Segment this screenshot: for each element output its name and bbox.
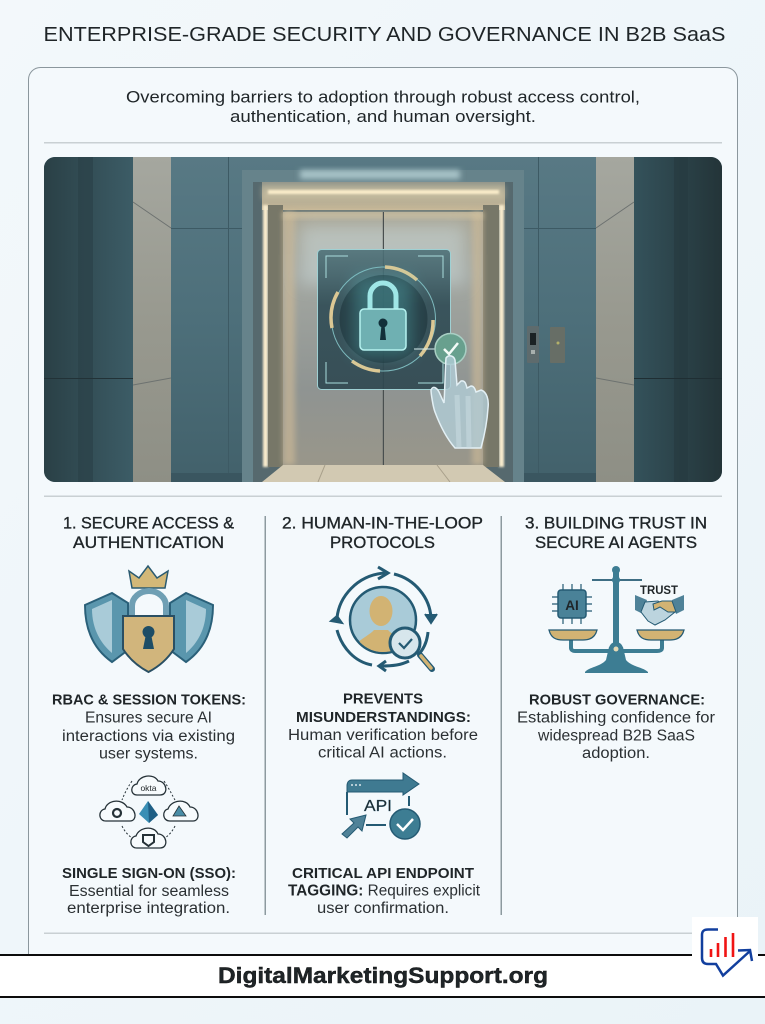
door frame xyxy=(242,170,524,482)
text: prevents misunderstandings: Human verification before xyxy=(288,727,478,744)
column 3: building trust in secure AI agents xyxy=(517,514,715,762)
column 1: secure access and authentication xyxy=(52,514,246,917)
text: prevents misunderstandings xyxy=(288,690,478,762)
doors xyxy=(283,212,483,465)
icon: shields, padlock and crown xyxy=(85,566,213,672)
left wall xyxy=(44,157,133,482)
text: robust governance: ROBUST GOVERNANCE: xyxy=(529,692,705,708)
lintel and light strips xyxy=(262,182,505,210)
text: RBAC and session tokens: Ensures secure AI xyxy=(85,710,212,726)
heading 1 xyxy=(63,514,235,552)
subtitle: authentication, and human oversight. xyxy=(230,108,536,126)
text: single sign-on: Essential for seamless xyxy=(69,883,229,900)
icon: scale balancing AI and trust xyxy=(549,566,684,673)
icon: human verification loop xyxy=(331,567,437,671)
text: robust governance: Establishing confidence for xyxy=(517,710,715,726)
text: prevents misunderstandings: PREVENTS xyxy=(343,690,423,708)
icon: API endpoint arrow and check: API xyxy=(364,798,392,815)
text: robust governance: widespread B2B SaaS xyxy=(537,728,695,744)
text: prevents misunderstandings: MISUNDERSTANDINGS: xyxy=(296,709,471,726)
footer band: DigitalMarketingSupport.org xyxy=(218,963,548,988)
heading 3: SECURE AI AGENTS xyxy=(535,533,697,552)
icon: scale balancing AI and trust: TRUST xyxy=(640,585,678,597)
icon: scale balancing AI and trust: AI xyxy=(565,598,579,613)
glowing padlock xyxy=(354,276,412,356)
column 2: human-in-the-loop protocols xyxy=(282,514,483,917)
pillars xyxy=(133,157,171,482)
text: RBAC and session tokens: interactions via existing xyxy=(62,728,235,745)
text: critical API endpoint tagging xyxy=(288,865,481,917)
heading 2: 2. HUMAN-IN-THE-LOOP xyxy=(282,514,483,532)
floor xyxy=(262,465,505,482)
heading 2: PROTOCOLS xyxy=(330,533,435,552)
text: RBAC and session tokens: user systems. xyxy=(99,746,198,762)
subtitle xyxy=(126,88,640,126)
icon: single sign-on clouds xyxy=(100,776,198,848)
title: ENTERPRISE-GRADE SECURITY AND GOVERNANCE IN B2B SaaS xyxy=(44,24,726,46)
heading 1: 1. SECURE ACCESS & xyxy=(63,514,235,532)
heading 3 xyxy=(525,514,707,552)
text: critical API endpoint tagging: TAGGING: Requires explicit xyxy=(288,882,481,900)
holographic hand xyxy=(431,356,488,448)
text: single sign-on xyxy=(62,865,236,917)
logo xyxy=(692,917,758,977)
text: critical API endpoint tagging: CRITICAL API ENDPOINT xyxy=(292,865,474,882)
text: single sign-on: enterprise integration. xyxy=(67,900,230,917)
heading 1: AUTHENTICATION xyxy=(73,533,224,552)
text: RBAC and session tokens xyxy=(52,692,246,762)
text: single sign-on: SINGLE SIGN-ON (SSO): xyxy=(62,865,236,882)
icon: single sign-on clouds: okta xyxy=(140,783,157,793)
footer band xyxy=(0,954,765,998)
checkmark button xyxy=(414,334,466,364)
holographic panel xyxy=(318,250,450,390)
subtitle: Overcoming barriers to adoption through robust access control, xyxy=(126,88,640,106)
heading 3: 3. BUILDING TRUST IN xyxy=(525,514,707,532)
text: RBAC and session tokens: RBAC & SESSION TOKENS: xyxy=(52,692,246,708)
icon: API endpoint arrow and check xyxy=(342,773,420,839)
text: critical API endpoint tagging: user confirmation. xyxy=(317,900,449,917)
text: prevents misunderstandings: critical AI actions. xyxy=(318,744,447,762)
call panels xyxy=(527,326,565,363)
heading 2 xyxy=(282,514,483,552)
text: robust governance: adoption. xyxy=(582,745,650,762)
right wall xyxy=(634,157,722,482)
center wall xyxy=(171,157,596,482)
text: robust governance xyxy=(517,692,715,762)
hero image: secure elevator door with holographic lock xyxy=(44,157,722,482)
